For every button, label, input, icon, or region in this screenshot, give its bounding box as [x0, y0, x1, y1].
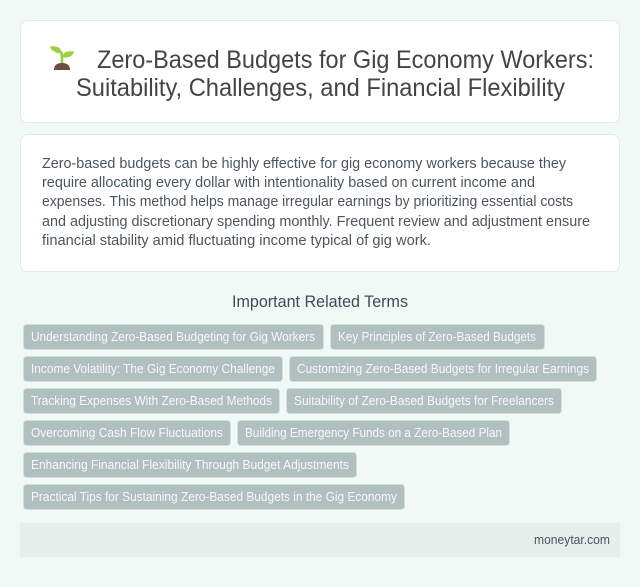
tag: Practical Tips for Sustaining Zero-Based Budgets in the Gig Economy [31, 490, 398, 504]
tag: Enhancing Financial Flexibility Through Budget Adjustments [31, 458, 349, 472]
tag: Understanding Zero-Based Budgeting for Gig Workers [31, 330, 315, 344]
summary paragraph: and adjusting discretionary spending monthly. Frequent review and adjustment ensure [42, 213, 590, 230]
summary paragraph: Zero-based budgets can be highly effective for gig economy workers because they [42, 155, 566, 172]
tag: Key Principles of Zero-Based Budgets [338, 330, 536, 344]
tag: Customizing Zero-Based Budgets for Irregular Earnings [297, 362, 589, 376]
tag [24, 388, 280, 414]
tag [24, 324, 324, 350]
tag: Tracking Expenses With Zero-Based Methods [31, 394, 272, 408]
tag [24, 484, 404, 510]
footer [20, 523, 620, 557]
tag [24, 420, 230, 446]
tag: Income Volatility: The Gig Economy Challenge [31, 362, 275, 376]
tag: Building Emergency Funds on a Zero-Based Plan [245, 426, 502, 440]
title panel [20, 20, 620, 122]
tag [286, 388, 562, 414]
icon: seedling [50, 46, 74, 70]
footer source text: moneytar.com [534, 532, 610, 547]
tag [238, 420, 510, 446]
tag: Suitability of Zero-Based Budgets for Freelancers [294, 394, 554, 408]
summary paragraph: require allocating every dollar with intentionality based on current income and [42, 174, 535, 191]
tag [290, 356, 596, 382]
tag: Overcoming Cash Flow Fluctuations [31, 426, 223, 440]
related terms heading: Important Related Terms [232, 293, 408, 311]
title text: Zero-Based Budgets for Gig Economy Workers: [97, 46, 594, 74]
tag [24, 452, 356, 478]
summary panel [20, 134, 620, 272]
tag [24, 356, 282, 382]
tag [330, 324, 544, 350]
title text: Suitability, Challenges, and Financial Flexibility [76, 74, 565, 102]
summary paragraph: financial stability amid fluctuating income typical of gig work. [42, 232, 431, 249]
related terms tags [24, 324, 596, 510]
summary paragraph: expenses. This method helps manage irregular earnings by prioritizing essential costs [42, 193, 573, 210]
